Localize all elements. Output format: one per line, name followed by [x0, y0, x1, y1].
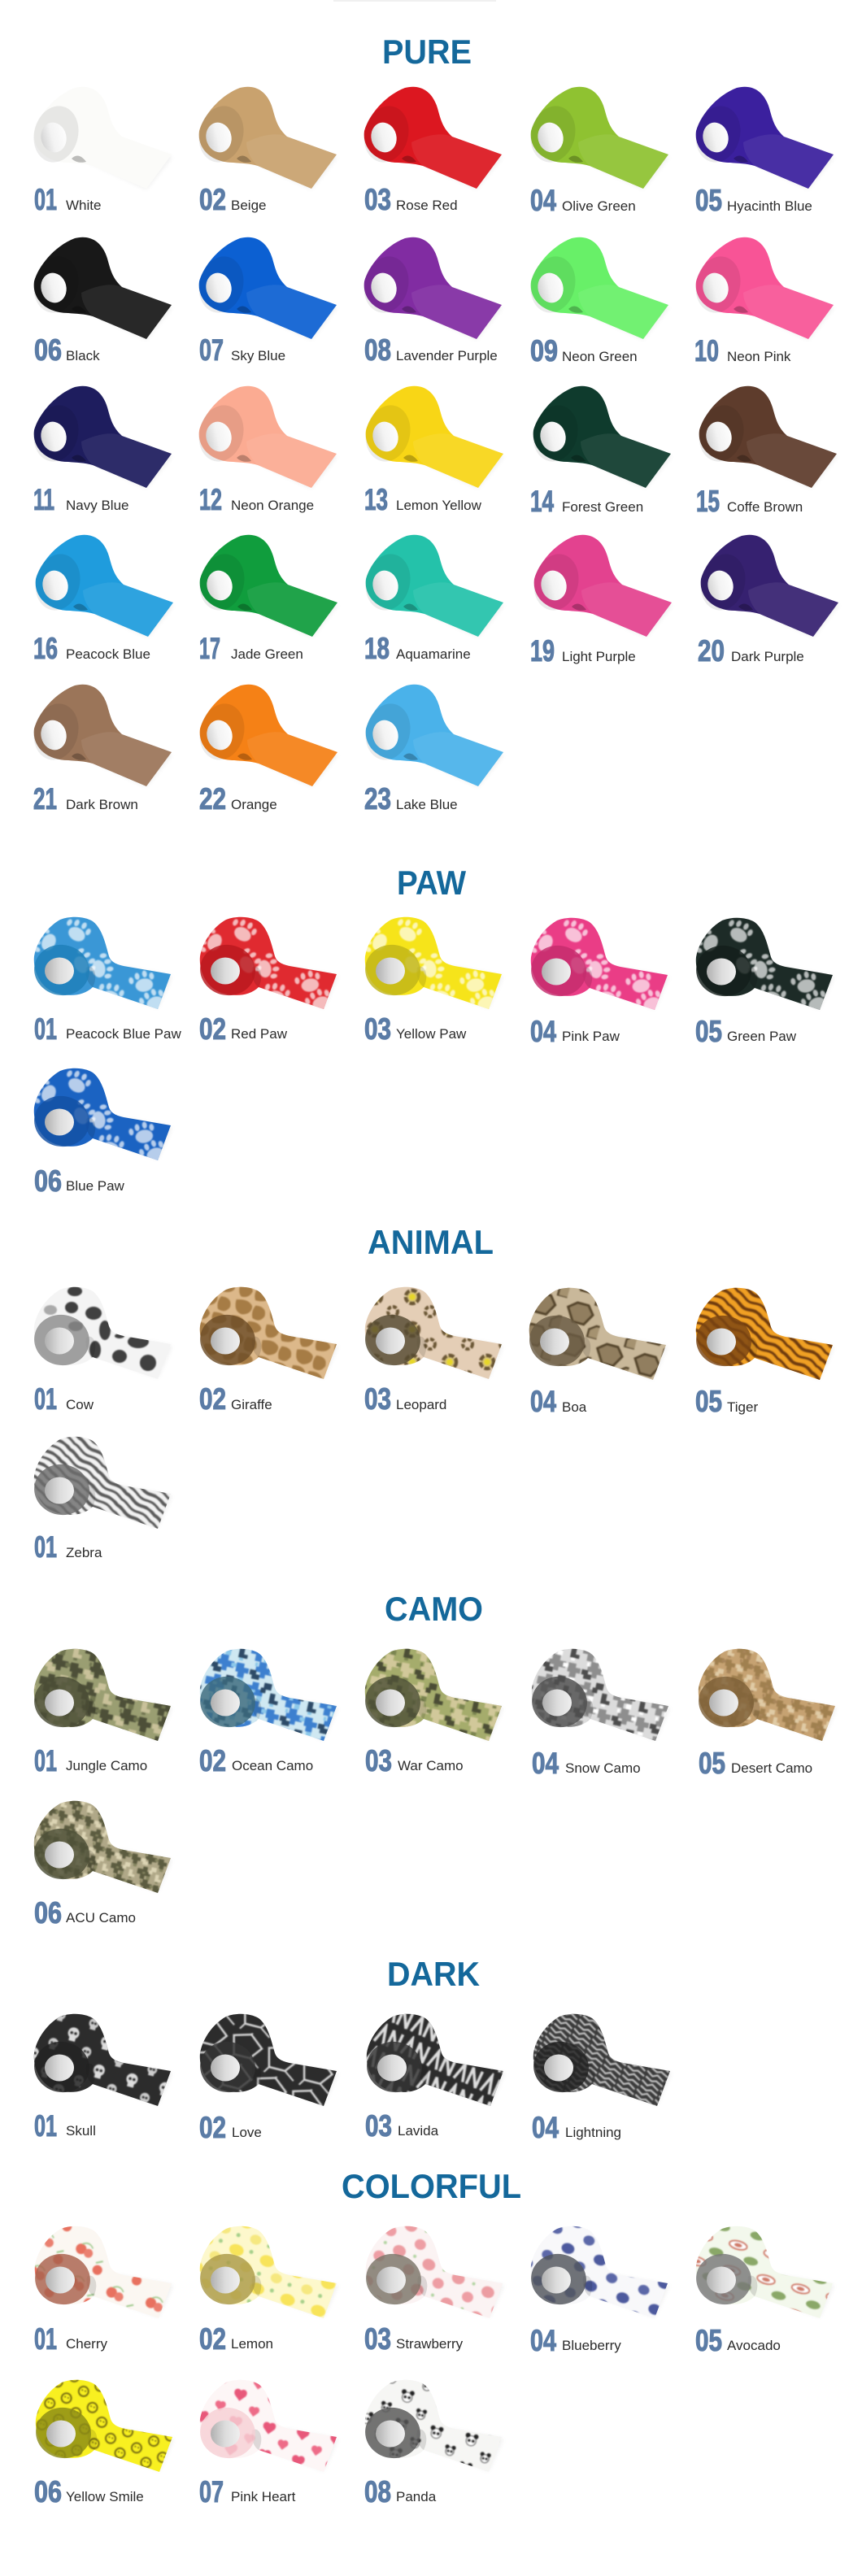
- roll: lemon yellow: [359, 386, 504, 489]
- roll: blueberry: [527, 2225, 671, 2322]
- name: Neon Pink: [727, 349, 791, 364]
- swatch: 12 Neon Orange: [193, 386, 337, 516]
- swatch: 03 Leopard: [361, 1286, 505, 1416]
- roll: lightning: [529, 2012, 673, 2110]
- roll: black: [28, 237, 172, 340]
- name: ACU Camo: [66, 1910, 136, 1925]
- roll: light purple: [528, 535, 673, 637]
- number: 02: [199, 1012, 226, 1046]
- name: Blueberry: [562, 2338, 621, 2353]
- roll: neon green: [525, 237, 669, 340]
- number: 04: [530, 1385, 556, 1418]
- swatch: 13 Lemon Yellow: [359, 386, 504, 516]
- roll: dark purple: [694, 535, 839, 637]
- roll: giraffe: [196, 1286, 340, 1383]
- swatch: 02 Lemon: [196, 2225, 340, 2356]
- heading: DARK: DARK: [387, 1955, 480, 1993]
- roll: pink heart: [196, 2378, 340, 2476]
- name: Light Purple: [562, 649, 636, 664]
- roll: neon pink: [690, 237, 834, 340]
- name: Dark Purple: [731, 649, 804, 664]
- swatch: 09 Neon Green: [525, 237, 669, 368]
- swatch: 04 Lightning: [529, 2012, 673, 2144]
- name: Desert Camo: [731, 1760, 812, 1776]
- name: Pink Heart: [231, 2489, 296, 2504]
- heading: PURE: PURE: [382, 33, 472, 71]
- swatch: 02 Ocean Camo: [196, 1647, 340, 1778]
- number: 07: [199, 2475, 224, 2509]
- name: Cherry: [66, 2336, 108, 2352]
- roll: tiger: [692, 1286, 836, 1384]
- name: Forest Green: [562, 499, 643, 515]
- number: 02: [199, 2322, 226, 2356]
- swatch: 07 Pink Heart: [196, 2378, 340, 2509]
- section: CAMO: [30, 1590, 838, 1930]
- roll: leopard: [361, 1286, 505, 1383]
- number: 16: [33, 632, 58, 665]
- roll: peacock blue: [29, 535, 174, 637]
- number: 03: [365, 1744, 392, 1778]
- name: Snow Camo: [565, 1760, 641, 1776]
- swatch: 20 Dark Purple: [694, 535, 839, 668]
- number: 04: [530, 184, 556, 217]
- number: 06: [34, 1896, 62, 1930]
- swatch: 01 Skull: [30, 2012, 174, 2143]
- name: Green Paw: [727, 1029, 797, 1044]
- swatch: 03 Strawberry: [362, 2225, 506, 2356]
- swatch: 18 Aquamarine: [359, 535, 504, 665]
- name: Leopard: [396, 1397, 446, 1412]
- swatch: 01 White: [28, 87, 172, 216]
- number: 15: [696, 485, 720, 518]
- roll: pink paw: [530, 917, 668, 1010]
- roll: sky blue: [193, 237, 337, 340]
- swatch: 02 Giraffe: [196, 1286, 340, 1416]
- number: 19: [530, 634, 555, 668]
- swatch: 06 Blue Paw: [34, 1068, 171, 1192]
- swatch: 08 Lavender Purple: [358, 237, 503, 367]
- roll: green paw: [696, 917, 833, 1010]
- swatch: 14 Forest Green: [527, 386, 672, 518]
- name: Giraffe: [231, 1397, 272, 1412]
- name: Beige: [231, 198, 266, 213]
- number: 06: [34, 333, 62, 367]
- name: Dark Brown: [66, 797, 138, 812]
- name: Tiger: [727, 1399, 758, 1415]
- swatch: 05 Tiger: [692, 1286, 836, 1418]
- name: Jungle Camo: [66, 1758, 147, 1773]
- name: Zebra: [66, 1545, 102, 1560]
- swatch: 11 Navy Blue: [28, 386, 172, 516]
- number: 22: [199, 782, 226, 816]
- swatch: 04 Blueberry: [527, 2225, 671, 2357]
- roll: love: [196, 2012, 340, 2110]
- swatch: 01 Zebra: [30, 1435, 174, 1564]
- number: 05: [699, 1747, 725, 1780]
- roll: yellow smile: [32, 2378, 176, 2476]
- name: Jade Green: [231, 646, 303, 662]
- name: Peacock Blue: [66, 646, 150, 662]
- swatch: 06 ACU Camo: [30, 1799, 174, 1930]
- name: Lemon Yellow: [396, 498, 482, 513]
- roll: jungle camo: [30, 1647, 174, 1745]
- roll: lavida: [363, 2012, 507, 2110]
- number: 05: [695, 184, 722, 217]
- name: Rose Red: [396, 198, 458, 213]
- number: 21: [33, 782, 57, 816]
- number: 23: [364, 782, 391, 816]
- swatch: 04 Pink Paw: [530, 917, 668, 1042]
- swatch: 03 War Camo: [361, 1647, 505, 1778]
- swatch: 01 Peacock Blue Paw: [29, 915, 181, 1046]
- name: War Camo: [398, 1758, 464, 1773]
- swatch: 17 Jade Green: [194, 535, 338, 665]
- roll: lavender purple: [358, 237, 503, 340]
- section: PURE: [28, 33, 839, 816]
- swatch: 04 Boa: [525, 1286, 669, 1418]
- number: 07: [199, 333, 224, 367]
- number: 11: [33, 483, 54, 516]
- number: 04: [530, 2324, 556, 2357]
- swatch: 16 Peacock Blue: [29, 535, 174, 665]
- name: Boa: [562, 1399, 587, 1415]
- name: Black: [66, 348, 100, 363]
- roll: beige: [193, 87, 337, 189]
- swatch: 01 Cow: [30, 1286, 172, 1416]
- roll: boa: [525, 1286, 669, 1384]
- roll: dark brown: [28, 685, 172, 787]
- roll: olive green: [525, 87, 669, 189]
- roll: desert camo: [694, 1647, 838, 1745]
- number: 02: [199, 183, 226, 216]
- roll: snow camo: [528, 1647, 672, 1745]
- name: White: [66, 198, 101, 213]
- swatch: 05 Avocado: [692, 2225, 836, 2357]
- roll: red paw: [200, 917, 337, 1009]
- name: Strawberry: [396, 2336, 464, 2352]
- section: DARK: [30, 1955, 673, 2144]
- number: 13: [364, 483, 388, 516]
- number: 04: [532, 2111, 559, 2144]
- roll: war camo: [361, 1647, 505, 1745]
- number: 20: [698, 634, 725, 668]
- number: 03: [364, 1012, 391, 1046]
- section: ANIMAL: [30, 1223, 836, 1564]
- number: 01: [34, 1382, 57, 1416]
- swatch: 02 Beige: [193, 87, 337, 216]
- section: PAW: [29, 864, 834, 1198]
- heading: PAW: PAW: [397, 864, 466, 902]
- number: 01: [34, 1012, 57, 1046]
- name: Panda: [396, 2489, 437, 2504]
- roll: white: [28, 87, 172, 189]
- number: 04: [530, 1015, 556, 1048]
- roll: avocado: [692, 2225, 836, 2322]
- swatch: 01 Jungle Camo: [30, 1647, 174, 1778]
- swatch: 08 Panda: [361, 2378, 505, 2509]
- roll: blue paw: [34, 1068, 171, 1160]
- name: Love: [232, 2125, 262, 2140]
- name: Coffe Brown: [727, 499, 803, 515]
- number: 01: [34, 1530, 57, 1564]
- roll: lemon: [196, 2225, 340, 2322]
- name: Lavender Purple: [396, 348, 498, 363]
- roll: zebra: [30, 1435, 174, 1533]
- roll: strawberry: [362, 2225, 506, 2322]
- swatch: 05 Hyacinth Blue: [690, 87, 834, 217]
- name: Skull: [66, 2123, 96, 2139]
- swatch: 02 Love: [196, 2012, 340, 2144]
- swatch: 22 Orange: [194, 685, 338, 816]
- name: Lemon: [231, 2336, 273, 2352]
- name: Aquamarine: [396, 646, 471, 662]
- number: 01: [34, 2109, 57, 2143]
- number: 04: [532, 1747, 559, 1780]
- name: Yellow Smile: [66, 2489, 144, 2504]
- number: 08: [364, 2475, 391, 2509]
- name: Blue Paw: [66, 1178, 125, 1194]
- number: 02: [199, 1744, 226, 1778]
- name: Lavida: [398, 2123, 439, 2139]
- heading: ANIMAL: ANIMAL: [368, 1223, 494, 1261]
- name: Ocean Camo: [232, 1758, 313, 1773]
- swatch: 07 Sky Blue: [193, 237, 337, 367]
- roll: cherry: [31, 2225, 175, 2322]
- swatch: 21 Dark Brown: [28, 685, 172, 816]
- number: 01: [34, 183, 57, 216]
- swatch: 06 Yellow Smile: [32, 2378, 176, 2509]
- number: 05: [695, 2324, 722, 2357]
- section: COLORFUL: [31, 2167, 836, 2509]
- name: Cow: [66, 1397, 94, 1412]
- number: 12: [199, 483, 222, 516]
- roll: peacock blue paw: [34, 917, 171, 1009]
- name: Pink Paw: [562, 1029, 620, 1044]
- swatch: 04 Snow Camo: [528, 1647, 672, 1780]
- roll: skull: [30, 2012, 174, 2110]
- roll: navy blue: [28, 386, 172, 489]
- number: 01: [34, 1744, 57, 1778]
- swatch: 05 Desert Camo: [694, 1647, 838, 1780]
- swatch: 15 Coffe Brown: [693, 386, 838, 518]
- name: Hyacinth Blue: [727, 198, 812, 214]
- number: 09: [530, 334, 558, 368]
- number: 03: [365, 2109, 392, 2143]
- roll: cow: [30, 1286, 172, 1379]
- number: 06: [34, 2475, 62, 2509]
- swatch: 04 Olive Green: [525, 87, 669, 217]
- swatch: 02 Red Paw: [200, 917, 337, 1040]
- swatch: 19 Light Purple: [528, 535, 673, 668]
- number: 06: [34, 1164, 62, 1198]
- swatch: 05 Green Paw: [696, 917, 833, 1042]
- roll: jade green: [194, 535, 338, 637]
- name: Peacock Blue Paw: [66, 1026, 181, 1042]
- number: 05: [695, 1385, 722, 1418]
- name: Lake Blue: [396, 797, 458, 812]
- name: Sky Blue: [231, 348, 285, 363]
- swatch: 01 Cherry: [31, 2225, 175, 2356]
- swatch: 03 Rose Red: [358, 87, 503, 216]
- swatch: 10 Neon Pink: [690, 237, 834, 368]
- name: Navy Blue: [66, 498, 128, 513]
- roll: rose red: [358, 87, 503, 189]
- number: 02: [199, 1382, 226, 1416]
- roll: coffe brown: [693, 386, 838, 489]
- heading: CAMO: CAMO: [385, 1590, 483, 1628]
- name: Avocado: [727, 2338, 781, 2353]
- number: 03: [364, 2322, 391, 2356]
- name: Orange: [231, 797, 277, 812]
- roll: panda: [361, 2378, 505, 2476]
- number: 03: [364, 183, 391, 216]
- swatch: 23 Lake Blue: [359, 685, 504, 816]
- swatch: 03 Yellow Paw: [364, 917, 502, 1040]
- roll: aquamarine: [359, 535, 504, 637]
- name: Neon Green: [562, 349, 638, 364]
- number: 14: [530, 485, 554, 518]
- number: 08: [364, 333, 391, 367]
- roll: neon orange: [193, 386, 337, 489]
- roll: acu camo: [30, 1799, 174, 1897]
- roll: hyacinth blue: [690, 87, 834, 189]
- number: 02: [199, 2111, 226, 2144]
- name: Olive Green: [562, 198, 636, 214]
- number: 17: [199, 632, 220, 665]
- roll: forest green: [527, 386, 672, 489]
- roll: lake blue: [359, 685, 504, 787]
- name: Neon Orange: [231, 498, 314, 513]
- number: 01: [34, 2322, 57, 2356]
- roll: orange: [194, 685, 338, 787]
- swatch: 03 Lavida: [363, 2012, 507, 2143]
- swatch: 06 Black: [28, 237, 172, 367]
- heading: COLORFUL: COLORFUL: [342, 2167, 521, 2205]
- name: Yellow Paw: [396, 1026, 467, 1042]
- name: Red Paw: [231, 1026, 288, 1042]
- number: 10: [694, 334, 719, 368]
- name: Lightning: [565, 2125, 621, 2140]
- number: 03: [364, 1382, 391, 1416]
- roll: yellow paw: [364, 917, 502, 1009]
- number: 05: [695, 1015, 722, 1048]
- roll: ocean camo: [196, 1647, 340, 1745]
- number: 18: [364, 632, 390, 665]
